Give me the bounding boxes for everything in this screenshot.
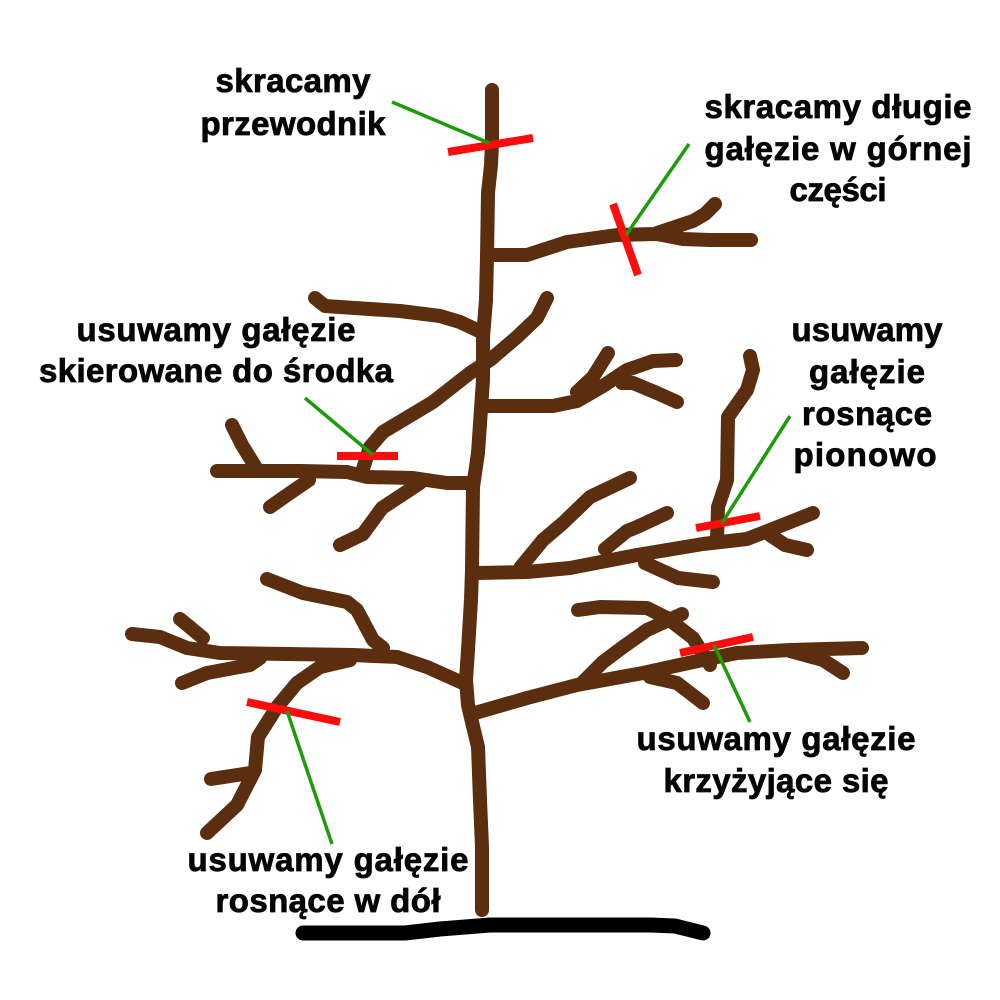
- label: shorten long upper branches: części: [790, 171, 886, 208]
- label: remove downward branches: usuwamy gałęzie: [188, 841, 468, 878]
- label: remove vertical branches: pionowo: [794, 436, 936, 473]
- label: remove downward branches: [188, 841, 468, 919]
- cut marks: [247, 138, 760, 722]
- label: shorten long upper branches: gałęzie w górnej: [704, 130, 972, 167]
- label: remove downward branches: rosnące w dół: [216, 882, 440, 919]
- branch: upper left: [315, 298, 479, 331]
- pointer lines: [287, 102, 790, 844]
- branch: lowest right: [475, 607, 862, 713]
- label: shorten leader: skracamy: [216, 62, 371, 99]
- branch: top right: [490, 204, 751, 255]
- label: remove inward branches: usuwamy gałęzie: [76, 311, 356, 348]
- label: remove vertical branches: [792, 311, 943, 473]
- branch: lower right: [477, 478, 813, 582]
- label: remove vertical branches: gałęzie: [809, 353, 925, 390]
- label: remove vertical branches: usuwamy: [792, 311, 943, 348]
- trunk: [466, 90, 492, 910]
- label: remove inward branches: skierowane do środka: [39, 352, 394, 389]
- label: remove vertical branches: rosnące: [802, 395, 932, 432]
- branch: middle left: [217, 425, 472, 545]
- branch: middle right: [482, 353, 677, 406]
- label: shorten long upper branches: [704, 88, 972, 208]
- label: remove crossing branches: [636, 720, 916, 799]
- ground line: [303, 925, 703, 933]
- label: shorten leader: [200, 62, 386, 142]
- branch: inward: [362, 298, 547, 472]
- label: shorten leader: przewodnik: [200, 105, 386, 142]
- tree: [132, 90, 862, 910]
- label: remove crossing branches: krzyżyjące się: [664, 762, 888, 799]
- label: shorten long upper branches: skracamy długie: [704, 88, 972, 125]
- branch: lower left: [132, 579, 465, 684]
- label: remove inward branches: [39, 311, 394, 389]
- label: remove crossing branches: usuwamy gałęzie: [636, 720, 916, 757]
- branch: vertical shoot: [717, 356, 753, 540]
- branch: downward: [207, 660, 350, 833]
